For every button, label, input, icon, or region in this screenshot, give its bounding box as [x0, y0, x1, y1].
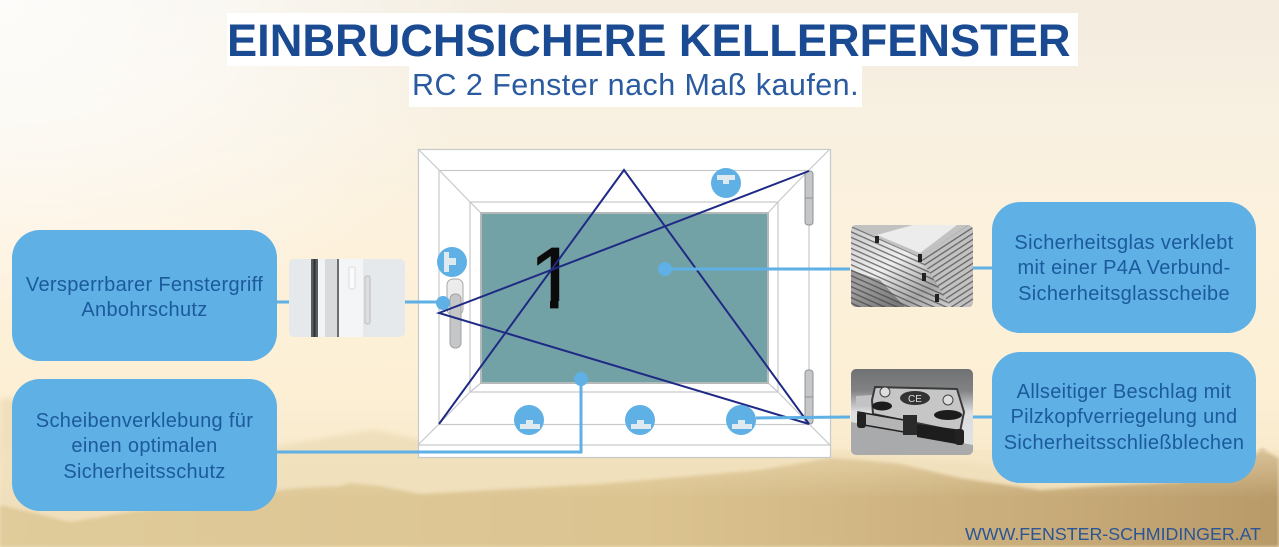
- callout: handle: Anbohrschutz: [81, 299, 208, 321]
- callout: fittings: Allseitiger Beschlag mit: [1017, 381, 1231, 403]
- callout: safety glass: mit einer P4A Verbund-: [1018, 257, 1230, 279]
- icon: bottom lock middle: [625, 405, 655, 435]
- lock icons: [437, 168, 756, 435]
- callout: safety glass: Sicherheitsglasscheibe: [1018, 283, 1230, 305]
- callout: fittings: Sicherheitsschließblechen: [1004, 432, 1244, 454]
- subtitle: RC 2 Fenster nach Maß kaufen.: [412, 68, 859, 102]
- photo: window handle: [289, 259, 405, 337]
- window handle: [447, 279, 463, 348]
- icon: bottom lock left: [514, 405, 544, 435]
- callout: safety glass: Sicherheitsglas verklebt: [1014, 232, 1234, 254]
- callout: glazing bond: einen optimalen: [71, 435, 218, 457]
- callout: glazing bond: Scheibenverklebung für: [36, 410, 253, 432]
- connector lines: [277, 268, 992, 452]
- callout: glazing bond: [12, 379, 277, 511]
- hinges: [805, 171, 813, 424]
- icon: top lock: [711, 168, 741, 198]
- outer frame: [418, 149, 830, 458]
- window diagram: [277, 148, 992, 458]
- photo: metal hinge fitting: [851, 369, 973, 455]
- number 1: 1: [529, 230, 578, 327]
- photo: stacked glass panes: [851, 222, 973, 307]
- photo: metal hinge fitting: CE: [908, 394, 922, 405]
- callout: handle: [12, 230, 277, 361]
- callout: fittings: [992, 352, 1256, 483]
- callout: handle: Versperrbarer Fenstergriff: [26, 274, 263, 296]
- glass pane: [481, 213, 768, 383]
- callout: safety glass: [992, 202, 1256, 333]
- icon: bottom lock right: [726, 405, 756, 435]
- title: EINBRUCHSICHERE KELLERFENSTER: [227, 15, 1071, 66]
- callout: glazing bond: Sicherheitsschutz: [63, 461, 226, 483]
- website url: WWW.FENSTER-SCHMIDINGER.AT: [965, 524, 1261, 544]
- callout: fittings: Pilzkopfverriegelung und: [1011, 406, 1237, 428]
- connector dots: [436, 262, 672, 386]
- opening lines: [439, 170, 809, 424]
- icon: handle-side lock: [437, 247, 467, 277]
